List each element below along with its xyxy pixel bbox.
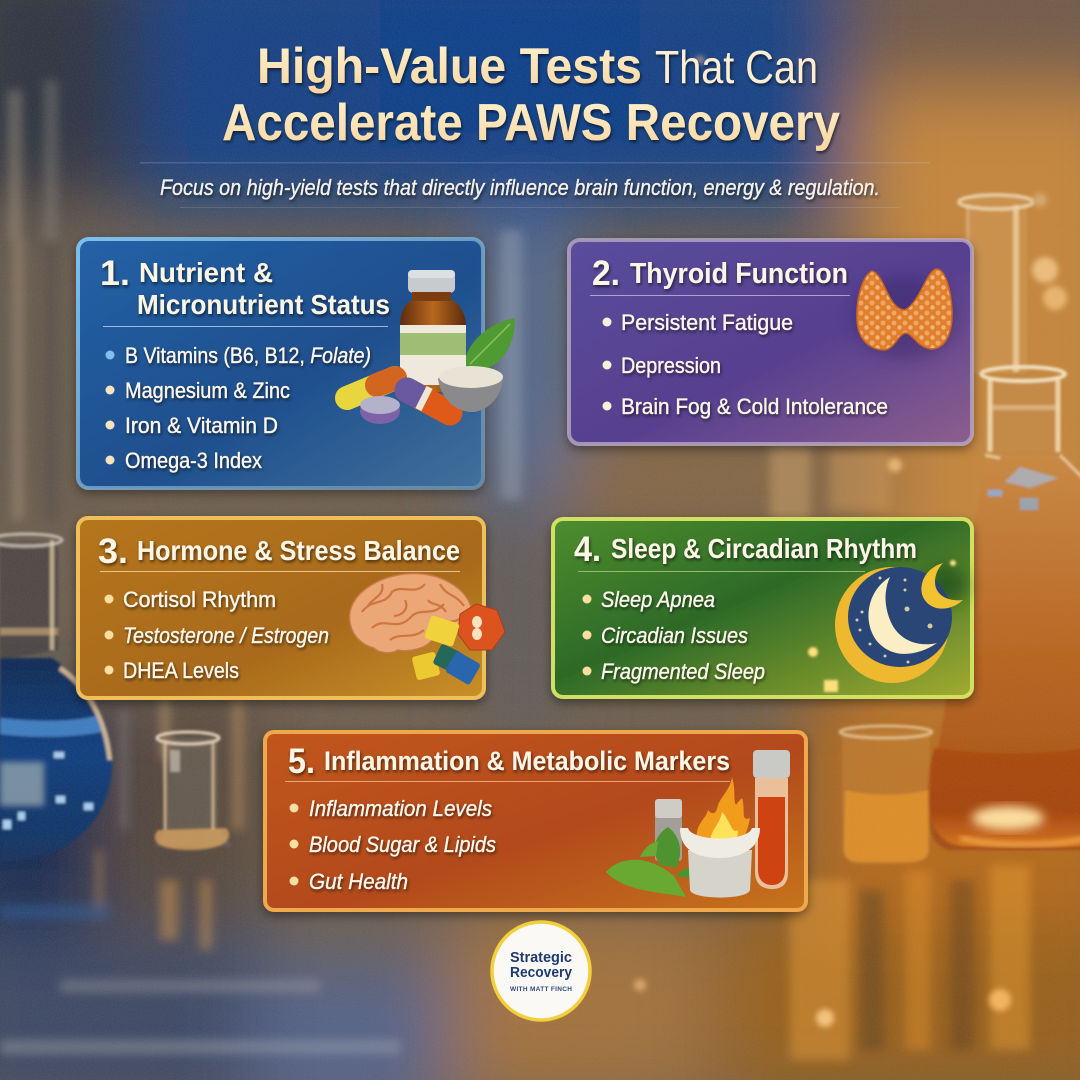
panel 2 list: Brain Fog & Cold Intolerance <box>621 394 888 419</box>
panel: hormone and stress balance <box>78 518 505 698</box>
panel 3 heading <box>98 532 460 571</box>
title: Accelerate PAWS Recovery <box>222 94 840 152</box>
panel 1 list: Magnesium & Zinc <box>125 378 290 403</box>
icon: moon and crescent <box>808 560 967 692</box>
panel: thyroid function <box>569 240 972 444</box>
panel: sleep and circadian rhythm <box>553 519 972 697</box>
panel 5 list: Gut Health <box>309 869 408 894</box>
logo badge: Recovery <box>510 965 572 981</box>
flask: left blue round flask <box>0 534 112 862</box>
panel 3 heading: 3. <box>98 532 128 571</box>
panel 5 list: Blood Sugar & Lipids <box>309 832 496 857</box>
icon: thyroid gland <box>853 269 957 360</box>
panel 5 heading: 5. <box>288 742 315 781</box>
panel 1 list: Iron & Vitamin D <box>125 413 278 438</box>
panel 2 list: Depression <box>621 353 721 378</box>
panel 4 list: Fragmented Sleep <box>601 659 765 684</box>
beaker: small amber beaker <box>840 726 932 864</box>
subtitle: Focus on high-yield tests that directly influence brain function, energy & regulation. <box>160 175 880 200</box>
panel 5 list: Inflammation Levels <box>309 796 492 821</box>
icon: supplement bottle, pills and leaf <box>347 270 515 424</box>
logo badge: Strategic <box>510 950 572 966</box>
panel 4 list: Circadian Issues <box>601 623 748 648</box>
panel 3 list: DHEA Levels <box>123 658 239 683</box>
panel 1 heading <box>100 254 390 320</box>
panel 3 heading: Hormone & Stress Balance <box>137 535 460 566</box>
panel: inflammation and metabolic markers <box>265 732 806 910</box>
panel 1 list <box>106 343 371 473</box>
panel 4 heading: 4. <box>574 530 601 569</box>
logo badge <box>492 922 590 1020</box>
panel 3 list: Cortisol Rhythm <box>123 587 276 612</box>
panel 5 heading: Inflammation & Metabolic Markers <box>324 746 730 776</box>
title: That Can <box>655 41 818 93</box>
panel 4 list <box>582 587 765 684</box>
panel 1 heading: Nutrient & <box>139 257 273 288</box>
logo badge: WITH MATT FINCH <box>510 986 572 993</box>
panel 2 list: Persistent Fatigue <box>621 310 793 335</box>
title <box>222 38 840 152</box>
panel 2 heading <box>592 254 848 293</box>
panel 5 list <box>290 796 496 894</box>
title: High-Value Tests <box>257 38 642 94</box>
panel 3 list: Testosterone / Estrogen <box>123 623 329 648</box>
panel 2 heading: 2. <box>592 254 620 293</box>
panel 4 heading <box>574 530 917 569</box>
flask: large amber Erlenmeyer flask <box>927 367 1080 850</box>
panel 2 list <box>602 310 888 419</box>
panel 1 list: Omega-3 Index <box>125 448 262 473</box>
icon: brain with hormone blocks <box>350 573 505 685</box>
panel 4 list: Sleep Apnea <box>601 587 715 612</box>
panel 4 heading: Sleep & Circadian Rhythm <box>611 533 917 564</box>
icon: test tubes, flame and leaves <box>606 750 790 898</box>
flask: tall background cylinder <box>959 195 1033 373</box>
panel 5 heading <box>288 742 730 781</box>
panel 2 heading: Thyroid Function <box>630 258 848 290</box>
panel 1 heading: Micronutrient Status <box>137 289 390 320</box>
panel 1 list: B Vitamins (B6, B12, Folate) <box>125 343 371 368</box>
panel: nutrient and micronutrient status <box>78 239 515 488</box>
panel 3 list <box>104 587 329 683</box>
beaker: small left beaker <box>155 732 232 850</box>
panel 1 heading: 1. <box>100 254 130 293</box>
